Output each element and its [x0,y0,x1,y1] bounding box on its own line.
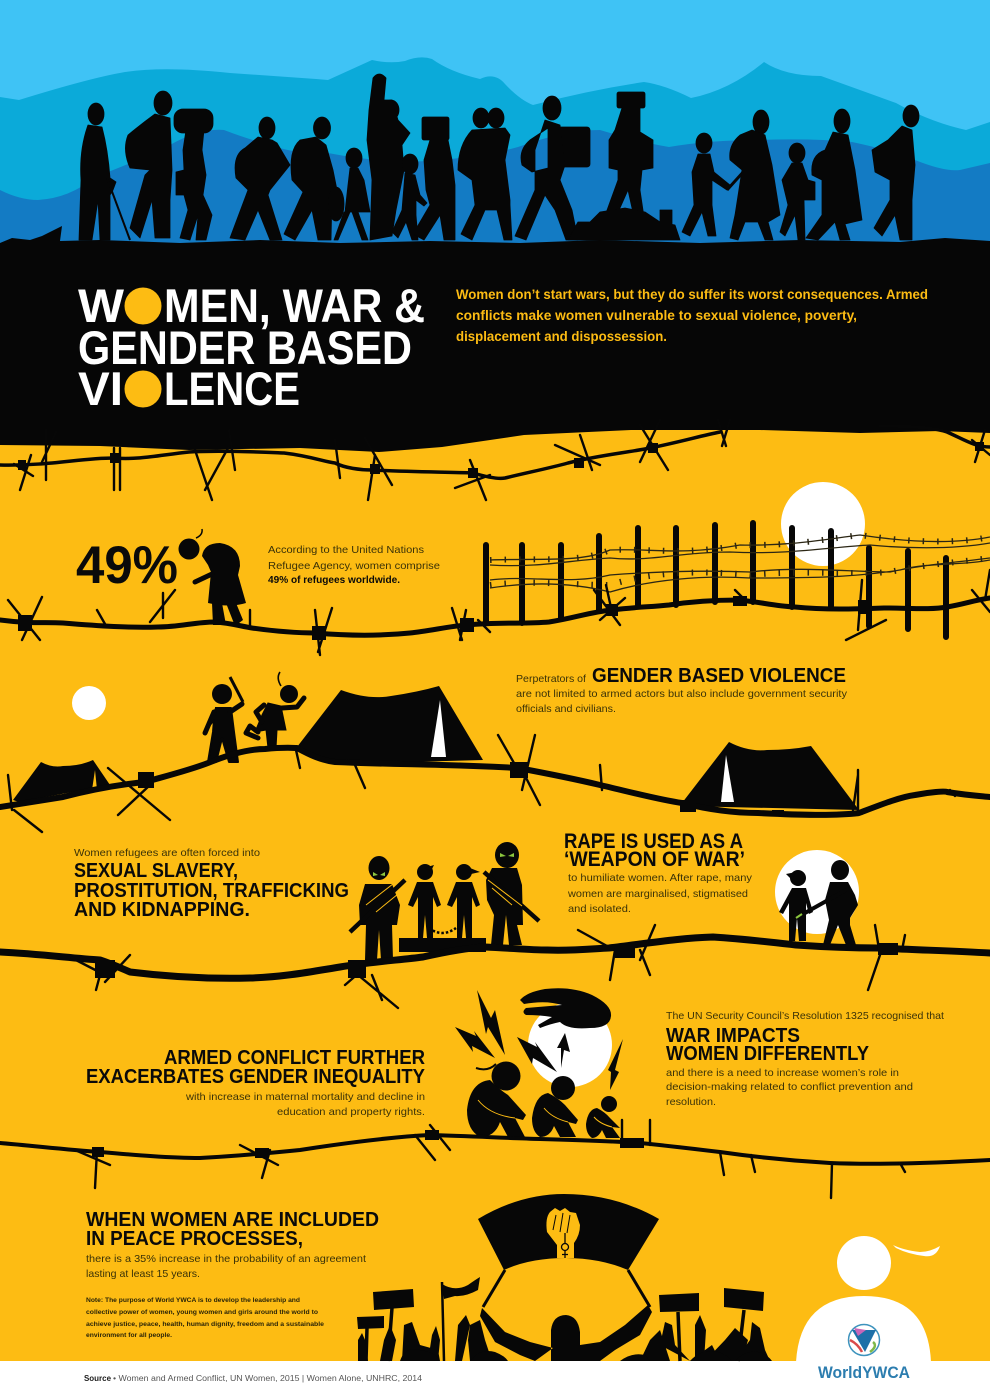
text: According to UNHCR: 49% of refugees worldwide. [268,574,400,586]
icon: protest banner with fist [478,1194,659,1307]
panel: armed conflict inequality [86,988,623,1138]
panel: sexual slavery [74,842,539,960]
text: peace processes [86,1209,379,1280]
text: armed conflict inequality [86,1047,426,1118]
barbed wire 2 [0,570,990,655]
icon: fence with wire [486,523,990,637]
text: sexual slavery: Women refugees are often forced into [74,847,260,859]
panel: rape as weapon of war [0,830,990,1008]
panel: 49% refugees [0,482,990,655]
icon: raised fist [546,1208,580,1258]
crowd arms [358,1315,770,1361]
sun [72,686,106,720]
intro text: displacement and dispossession. [456,329,667,344]
barbed wire 4 [0,925,990,1008]
text: According to UNHCR [268,544,440,586]
barbed wire 3 [0,735,990,832]
barbed wire 1 [0,420,990,500]
text: sexual slavery [74,847,349,921]
moon behind fence [781,482,865,566]
source line: • Women and Armed Conflict, UN Women, 2015 | Women Alone, UNHRC, 2014 [113,1374,423,1383]
text: armed conflict inequality: EXACERBATES GENDER INEQUALITY [86,1066,426,1088]
title: LENCE [164,362,300,415]
person: couple with pack [458,108,512,240]
icon: oppressing hand [520,988,611,1028]
text: peace processes: IN PEACE PROCESSES, [86,1228,303,1250]
person: woman with bundle [174,109,213,240]
mascot head [837,1236,891,1290]
person: man at front [872,105,919,240]
text: sexual slavery: PROSTITUTION, TRAFFICKING [74,879,349,902]
person: girl with bag [328,148,370,240]
text: rape as weapon of war: and isolated. [568,903,631,915]
text: sexual slavery: AND KIDNAPPING. [74,898,250,921]
woman left chained [408,864,441,938]
person: man with backpack [125,91,172,238]
text: note: collective power of women, young women and girls around the world to [86,1309,318,1316]
person: boy holding hands [682,133,745,236]
sky [0,0,990,250]
barbed wire 5 [0,1120,990,1198]
intro text [456,287,928,344]
person: man with box on head [413,117,455,240]
icon: girl with backpack [178,529,246,626]
icon: female symbol [562,1233,568,1258]
text: According to UNHCR: According to the United Nations [268,544,424,556]
text: note: achieve justice, peace, health, human dignity, freedom and a sustainable [86,1321,324,1328]
panel: women in peace processes [86,1194,772,1361]
moon [775,850,859,934]
text: gender based violence: are not limited to armed actors but also include government security [516,688,848,700]
icon: small left tent [13,760,110,802]
central figure holding banner [480,1305,652,1361]
platform [399,938,486,952]
text: gender based violence: GENDER BASED VIOLENCE [592,664,846,687]
text: rape as weapon of war: RAPE IS USED AS A [564,830,743,853]
text: rape as weapon of war: women are marginalised, stigmatised [567,888,748,900]
icon: lightning bolts [455,990,623,1090]
text: rape as weapon of war: to humiliate women. After rape, many [568,872,753,884]
text: rape as weapon of war [564,830,753,915]
panel: war impacts women differently: resolution. [666,1096,716,1108]
panel: war impacts women differently: WOMEN DIFFERENTLY [666,1043,870,1065]
title: MEN, WAR & [164,279,425,332]
person: walker with bag [230,117,290,240]
source line: Source [84,1374,112,1383]
intro text: conflicts make women vulnerable to sexual violence, poverty, [456,308,857,323]
moon [528,1003,612,1087]
black ground and title band [0,226,990,452]
soldier left [350,856,405,960]
icon: title O circle: O [125,279,161,332]
text: peace processes: WHEN WOMEN ARE INCLUDED [86,1209,379,1231]
person: on rubble with box [568,92,680,240]
mountains: middle layer [0,57,990,250]
text: armed conflict inequality: education and property rights. [277,1106,425,1118]
text: note: Note: The purpose of World YWCA is to develop the leadership and [86,1297,300,1304]
icon: right tent [682,742,859,810]
intro text: Women don’t start wars, but they do suffer its worst consequences. Armed [456,287,928,302]
text: gender based violence: officials and civilians. [516,703,616,715]
soldier right [484,842,539,945]
person: small girl [392,154,427,240]
footer background [0,1361,990,1400]
panel: gender based violence [0,664,990,832]
big stat: 49% [76,536,178,595]
woman right chained [447,864,480,938]
text: gender based violence: Perpetrators of [516,673,586,685]
panel: war impacts women differently: and there is a need to increase women’s role in [666,1067,899,1079]
text: armed conflict inequality: ARMED CONFLICT FURTHER [164,1047,426,1069]
text: note: environment for all people. [86,1332,172,1339]
logo emblem [848,1324,880,1356]
flag [442,1282,444,1361]
person: old man with cane [79,103,130,240]
panel: war impacts women differently: WAR IMPACTS [666,1025,800,1047]
icon: three seated women [467,1062,620,1138]
icon: man with club chasing woman [204,672,304,762]
icon: soldiers and chained women [350,842,539,960]
text: peace processes: there is a 35% increase in the probability of an agreement [86,1253,366,1265]
mascot hair [893,1245,940,1256]
text: note [86,1297,324,1339]
refugee silhouettes [79,74,919,240]
mountains: deep layer [0,130,990,250]
panel: war impacts women differently: The UN Security Council’s Resolution 1325 recognised that [666,1010,944,1022]
panel: war impacts women differently [666,1010,944,1108]
crowd heads [400,1349,772,1361]
person: child with bundle [780,143,815,240]
chain [429,928,456,933]
person: woman with shawl [806,109,862,240]
panel: header sky with refugees [0,0,990,452]
text: armed conflict inequality: with increase in maternal mortality and decline in [185,1091,425,1103]
title: W [78,279,125,332]
person: woman in dress [730,110,780,240]
person: man with box [515,96,590,240]
title [78,279,425,415]
mascot body [796,1296,931,1362]
text: peace processes: lasting at least 15 years. [86,1268,200,1280]
text: rape as weapon of war: ‘WEAPON OF WAR’ [564,848,745,871]
panel: war impacts women differently: decision-making related to conflict prevention and [666,1081,913,1093]
title: GENDER BASED [78,321,412,374]
icon: crowd with signs [357,1277,772,1361]
title: VI [78,362,123,415]
person: man carrying child [367,74,410,240]
text: sexual slavery: SEXUAL SLAVERY, [74,859,238,882]
person: man walking [284,117,338,240]
icon: big tent [297,686,483,764]
icon: title O circle 2: O [125,362,161,415]
text: According to UNHCR: Refugee Agency, women comprise [268,560,440,572]
logo text: WorldYWCA [818,1363,910,1382]
text: gender based violence [516,664,848,715]
mascot and logo [796,1236,940,1382]
icon: woman threatened by soldier [779,860,858,945]
protest signs [357,1288,764,1329]
